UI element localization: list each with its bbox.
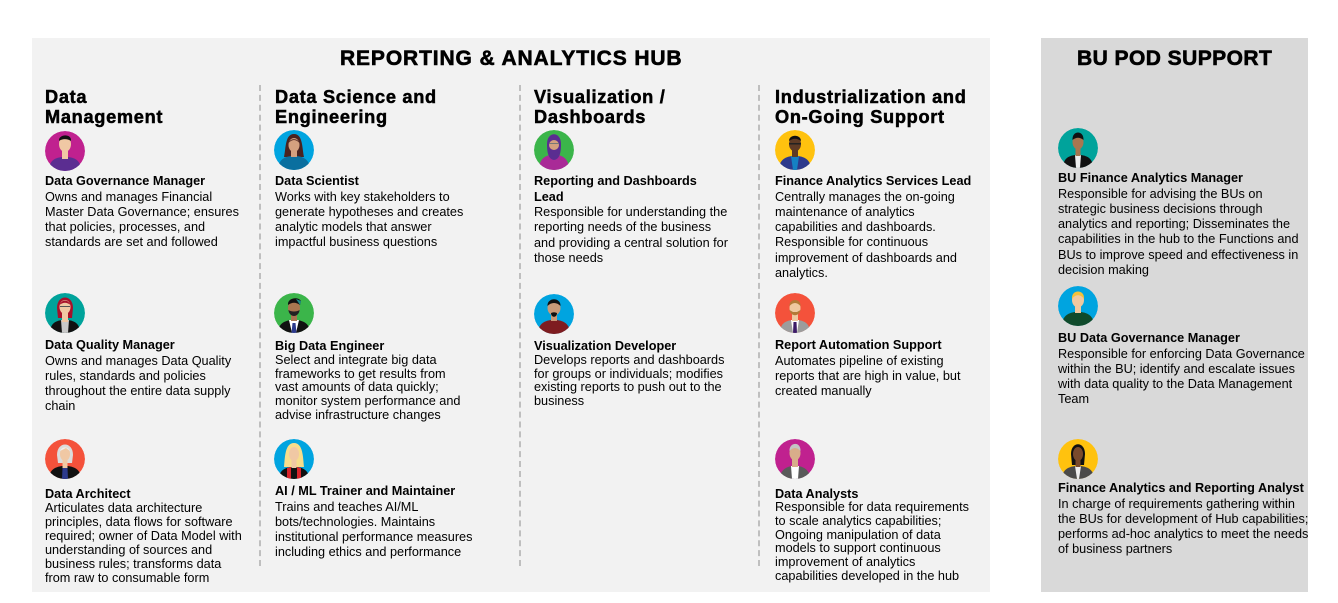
text: data scientist: generate hypotheses and creates bbox=[275, 205, 463, 219]
text: report automation support: Report Automation Support bbox=[775, 338, 942, 352]
icon: big data engineer avatar bbox=[274, 293, 314, 333]
text: BU data governance manager: Team bbox=[1058, 392, 1089, 406]
text: reporting and dashboards lead: and providing a central solution for bbox=[534, 236, 728, 250]
text: data analysts: Ongoing manipulation of data bbox=[775, 528, 941, 542]
heading: visualization and dashboards: Dashboards bbox=[534, 107, 646, 127]
text: visualization developer: Visualization Developer bbox=[534, 339, 676, 353]
text: data scientist: Works with key stakeholders to bbox=[275, 190, 450, 204]
text: data analysts: Data Analysts bbox=[775, 487, 858, 501]
heading: data science and engineering: Data Science and bbox=[275, 87, 437, 107]
text: BU data governance manager: within the BU; identify and escalate issues bbox=[1058, 362, 1295, 376]
text: reporting and dashboards lead bbox=[534, 174, 728, 265]
icon: data analysts avatar bbox=[775, 439, 815, 479]
text: BU data governance manager: Responsible for enforcing Data Governance bbox=[1058, 346, 1305, 360]
icon: visualization developer avatar bbox=[534, 294, 574, 334]
icon: BU data governance manager avatar bbox=[1058, 286, 1098, 326]
text: finance analytics services lead: Centrally manages the on-going bbox=[775, 190, 955, 204]
text: reporting and dashboards lead: reporting needs of the business bbox=[534, 220, 711, 234]
text: data scientist bbox=[275, 174, 463, 249]
text: reporting and dashboards lead: Responsible for understanding the bbox=[534, 205, 727, 219]
text: AI ML trainer and maintainer: AI / ML Trainer and Maintainer bbox=[275, 484, 455, 498]
icon: finance analytics and reporting analyst avatar bbox=[1058, 439, 1098, 479]
text: AI ML trainer and maintainer: institutional performance measures bbox=[275, 530, 472, 544]
text: finance analytics services lead: capabilities and dashboards. bbox=[775, 220, 936, 234]
title: reporting and analytics hub: REPORTING & ANALYTICS HUB bbox=[340, 47, 682, 70]
text: data quality manager: Data Quality Manager bbox=[45, 338, 175, 352]
text: big data engineer: frameworks to get results from bbox=[275, 367, 446, 381]
heading: data management: Data bbox=[45, 87, 87, 107]
text: finance analytics and reporting analyst: of business partners bbox=[1058, 542, 1172, 556]
text: BU finance analytics manager: BUs to improve speed and effectiveness in bbox=[1058, 248, 1298, 262]
text: data scientist: impactful business questions bbox=[275, 235, 437, 249]
text: data analysts: to scale analytics capabilities; bbox=[775, 514, 941, 528]
text: data architect: Data Architect bbox=[45, 487, 131, 501]
text: finance analytics services lead: maintenance of analytics bbox=[775, 205, 915, 219]
text: data governance manager: that policies, processes, and bbox=[45, 220, 205, 234]
heading: industrialization and on-going support: Industrialization and bbox=[775, 87, 967, 107]
heading: visualization and dashboards bbox=[534, 87, 665, 127]
text: visualization developer: existing reports to push out to the bbox=[534, 380, 722, 394]
icon: BU finance analytics manager avatar bbox=[1058, 128, 1098, 168]
text: reporting and dashboards lead: those needs bbox=[534, 251, 603, 265]
text: big data engineer: monitor system performance and bbox=[275, 394, 460, 408]
text: data quality manager: Owns and manages Data Quality bbox=[45, 354, 231, 368]
text: big data engineer: vast amounts of data quickly; bbox=[275, 380, 439, 394]
text: data analysts: improvement of analytics bbox=[775, 555, 915, 569]
icon: AI ML trainer avatar bbox=[274, 439, 314, 479]
text: reporting and dashboards lead: Reporting and Dashboards bbox=[534, 174, 697, 188]
heading: data management: Management bbox=[45, 107, 163, 127]
text: BU finance analytics manager: strategic business decisions through bbox=[1058, 202, 1263, 216]
text: data analysts bbox=[775, 487, 969, 583]
text: data analysts: capabilities developed in the hub bbox=[775, 569, 959, 583]
text: finance analytics and reporting analyst: Finance Analytics and Reporting Analyst bbox=[1058, 481, 1304, 495]
text: data quality manager bbox=[45, 338, 232, 413]
text: data quality manager: throughout the entire data supply bbox=[45, 384, 231, 398]
text: AI ML trainer and maintainer: including ethics and performance bbox=[275, 545, 461, 559]
text: data scientist: Data Scientist bbox=[275, 174, 359, 188]
icon: finance analytics services lead avatar bbox=[775, 130, 815, 170]
text: BU finance analytics manager bbox=[1058, 171, 1299, 277]
text: AI ML trainer and maintainer bbox=[275, 484, 472, 559]
text: data architect: principles, data flows for software bbox=[45, 515, 233, 529]
title: BU pod support: BU POD SUPPORT bbox=[1077, 47, 1272, 70]
text: data architect: required; owner of Data Model with bbox=[45, 529, 242, 543]
text: BU finance analytics manager: capabilities in the hub to the Functions and bbox=[1058, 232, 1299, 246]
text: finance analytics and reporting analyst: performs ad-hoc analytics to meet the needs bbox=[1058, 527, 1308, 541]
text: data analysts: Responsible for data requirements bbox=[775, 500, 969, 514]
text: finance analytics and reporting analyst: the BUs for development of Hub capabilities; bbox=[1058, 512, 1308, 526]
icon: data architect avatar bbox=[45, 439, 85, 479]
icon: data quality manager avatar bbox=[45, 293, 85, 333]
text: finance analytics services lead: Responsible for continuous bbox=[775, 235, 928, 249]
text: big data engineer: Select and integrate big data bbox=[275, 353, 437, 367]
text: data architect bbox=[45, 487, 242, 585]
icon: report automation support avatar bbox=[775, 293, 815, 333]
text: data governance manager: Owns and manages Financial bbox=[45, 190, 212, 204]
icon: data governance manager avatar bbox=[45, 131, 85, 171]
text: big data engineer: Big Data Engineer bbox=[275, 339, 384, 353]
text: BU finance analytics manager: analytics and reporting; Disseminates the bbox=[1058, 217, 1290, 231]
panel: BU pod support background bbox=[1041, 38, 1308, 592]
text: visualization developer bbox=[534, 339, 724, 408]
text: data governance manager: Data Governance Manager bbox=[45, 174, 205, 188]
heading: visualization and dashboards: Visualization / bbox=[534, 87, 665, 107]
text: finance analytics and reporting analyst: In charge of requirements gathering within bbox=[1058, 496, 1295, 510]
text: BU finance analytics manager: Responsible for advising the BUs on bbox=[1058, 186, 1263, 200]
text: report automation support bbox=[775, 338, 960, 398]
heading: data management bbox=[45, 87, 163, 128]
heading: data science and engineering bbox=[275, 87, 437, 128]
text: BU data governance manager: with data quality to the Data Management bbox=[1058, 377, 1292, 391]
heading: data science and engineering: Engineering bbox=[275, 107, 388, 127]
icon: reporting and dashboards lead avatar bbox=[534, 130, 574, 170]
text: visualization developer: business bbox=[534, 394, 584, 408]
text: data governance manager bbox=[45, 174, 239, 249]
text: BU data governance manager: BU Data Governance Manager bbox=[1058, 331, 1240, 345]
text: reporting and dashboards lead: Lead bbox=[534, 190, 564, 204]
text: data architect: Articulates data architecture bbox=[45, 501, 202, 515]
text: report automation support: reports that are high in value, but bbox=[775, 369, 960, 383]
text: finance analytics services lead: improvement of dashboards and bbox=[775, 251, 957, 265]
text: big data engineer: advise infrastructure changes bbox=[275, 408, 441, 422]
text: big data engineer bbox=[275, 339, 460, 422]
text: data quality manager: rules, standards and policies bbox=[45, 369, 206, 383]
text: visualization developer: Develops reports and dashboards bbox=[534, 353, 724, 367]
text: data architect: from raw to consumable form bbox=[45, 571, 209, 585]
text: data governance manager: standards are set and followed bbox=[45, 235, 218, 249]
text: data architect: understanding of sources and bbox=[45, 543, 212, 557]
text: AI ML trainer and maintainer: Trains and teaches AI/ML bbox=[275, 500, 418, 514]
text: finance analytics services lead: analytics. bbox=[775, 266, 828, 280]
text: BU finance analytics manager: BU Finance Analytics Manager bbox=[1058, 171, 1243, 185]
text: visualization developer: for groups or individuals; modifies bbox=[534, 366, 723, 380]
text: data quality manager: chain bbox=[45, 399, 75, 413]
icon: data scientist avatar bbox=[274, 130, 314, 170]
heading: industrialization and on-going support: On-Going Support bbox=[775, 107, 945, 127]
text: data analysts: models to support continuous bbox=[775, 541, 941, 555]
text: finance analytics and reporting analyst bbox=[1058, 481, 1308, 556]
text: BU finance analytics manager: decision making bbox=[1058, 263, 1149, 277]
text: AI ML trainer and maintainer: bots/technologies. Maintains bbox=[275, 515, 435, 529]
heading: industrialization and on-going support bbox=[775, 87, 967, 128]
text: data scientist: analytic models that answer bbox=[275, 220, 432, 234]
text: BU data governance manager bbox=[1058, 331, 1305, 406]
text: finance analytics services lead: Finance Analytics Services Lead bbox=[775, 174, 971, 188]
text: report automation support: created manually bbox=[775, 384, 872, 398]
text: data architect: business rules; transforms data bbox=[45, 557, 221, 571]
panel: reporting and analytics hub background bbox=[32, 38, 990, 592]
text: data governance manager: Master Data Governance; ensures bbox=[45, 205, 239, 219]
text: report automation support: Automates pipeline of existing bbox=[775, 354, 944, 368]
text: finance analytics services lead bbox=[775, 174, 971, 280]
